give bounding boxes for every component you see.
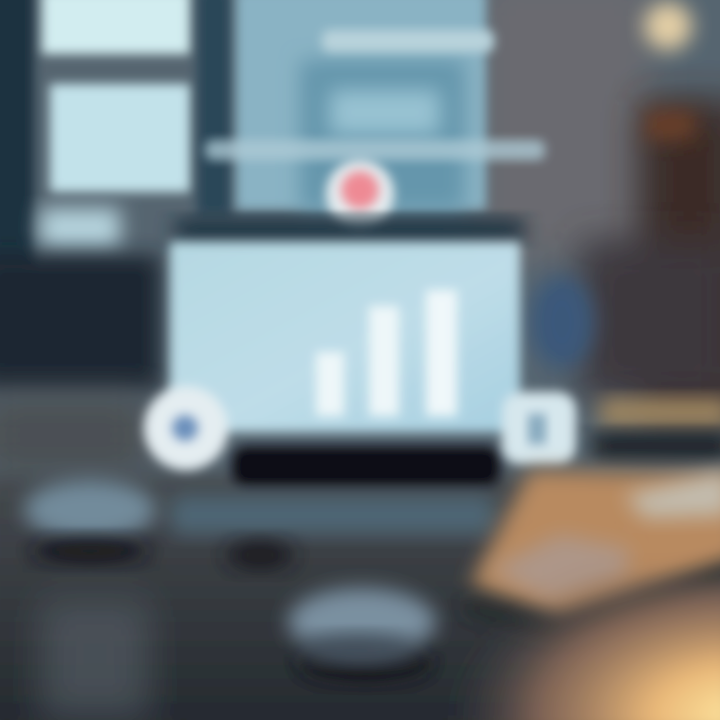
window: upper pane: [42, 0, 190, 54]
left mid-grey zone: [0, 395, 150, 475]
lamp glow: [644, 2, 695, 140]
backdrop panel: inner frame: [300, 60, 465, 210]
window: lower pane: [50, 84, 190, 192]
warm light on desk: [450, 575, 720, 720]
icon: white rounded tile: [502, 392, 576, 464]
bar chart: [316, 290, 457, 416]
heading blur: middle text strip: [205, 140, 545, 160]
laptop: keyboard blue reflection: [170, 495, 495, 535]
right shelf wood strip: [600, 398, 720, 426]
window: left dark frame: [0, 0, 34, 270]
window: bottom glare: [40, 208, 120, 248]
background: shelf shadow on right: [580, 240, 720, 400]
laptop: side accent blue object: [530, 276, 594, 368]
right dark strip: [592, 432, 720, 460]
notebook dark edge: [460, 562, 720, 640]
right tan table surface: [470, 470, 720, 615]
laptop: screen dashboard: [170, 242, 520, 432]
left dark furniture: [0, 255, 160, 390]
badge: pink alert circle: [326, 160, 394, 228]
laptop: base dark keyboard edge: [232, 446, 500, 486]
left device: blue mouse shape: [24, 480, 156, 564]
notebook: pale page: [625, 470, 720, 518]
desk surface: [0, 475, 720, 720]
backdrop panel: inner light area: [330, 90, 440, 135]
notebook: grey sheet: [490, 535, 630, 600]
background: right dark wooden furniture: [640, 100, 720, 420]
laptop: top bezel: [175, 218, 525, 242]
desk reflection: [40, 600, 150, 720]
mouse: body: [288, 588, 436, 682]
small dark object under laptop: [226, 539, 294, 571]
backdrop panel: pale blue poster: [236, 0, 486, 210]
background: right grey wall: [480, 0, 650, 260]
icon: round white gauge: [144, 386, 228, 470]
window: dark centre mullion: [197, 0, 231, 215]
heading blur: top text strip: [322, 30, 494, 52]
